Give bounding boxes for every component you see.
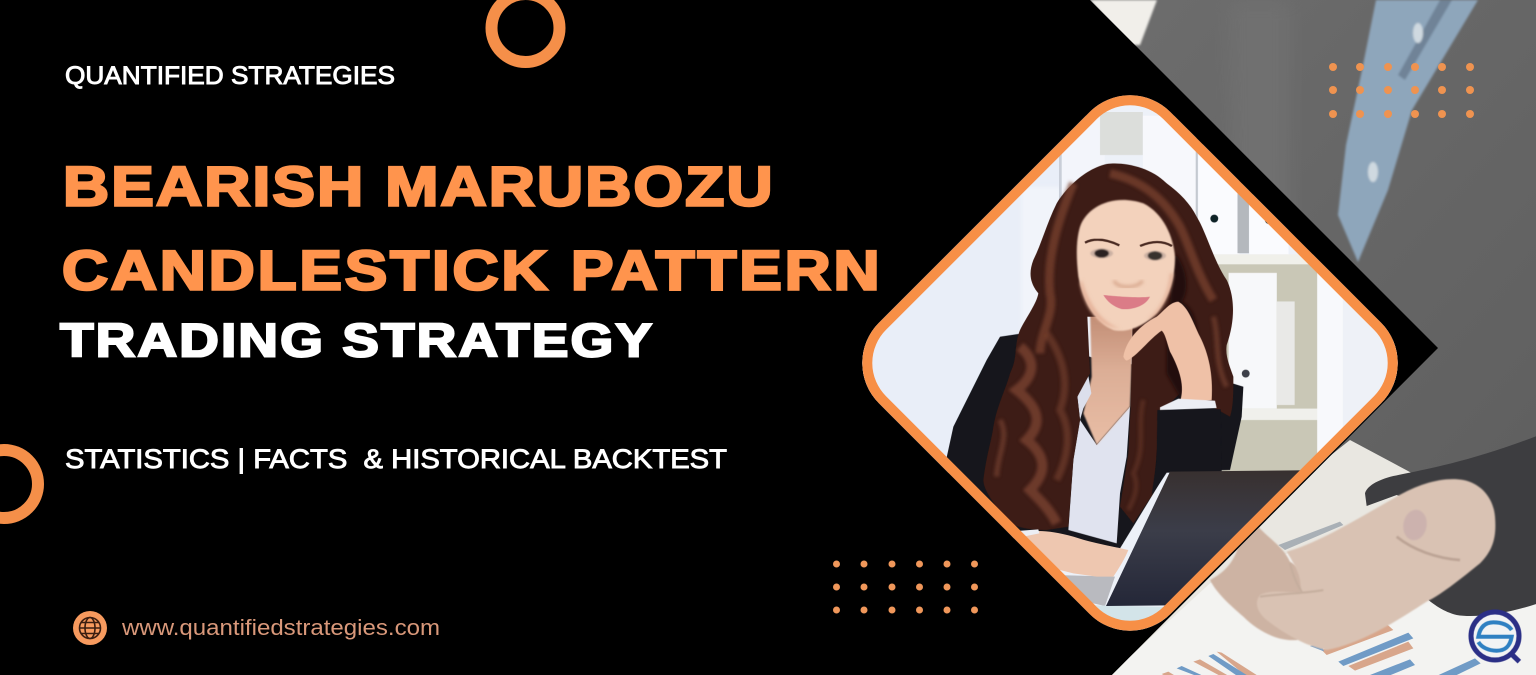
office shelves: [862, 112, 1398, 473]
back fingers: [1210, 527, 1302, 641]
subtitle: STATISTICS | FACTS & HISTORICAL BACKTEST: [65, 444, 727, 474]
dot grid top right: [1329, 63, 1474, 118]
neck and chest: [1083, 310, 1133, 445]
background photo: businessman with charts: [1090, 0, 1536, 675]
table and papers, drawn in enlarged coordinates: [1110, 433, 1536, 675]
paper edge: [1278, 522, 1343, 550]
open palm: [1257, 479, 1495, 650]
shirt cuff left: [1008, 529, 1039, 539]
blazer sleeve: [1152, 409, 1222, 495]
logo: SQ: [1471, 612, 1519, 662]
hand on chin: [1123, 302, 1212, 402]
hand on keyboard: [1017, 531, 1128, 577]
title line 1: BEARISH MARUBOZU: [63, 155, 773, 218]
laptop lid: [1106, 470, 1312, 606]
bar charts on paper: [1162, 624, 1481, 675]
businesswoman: [945, 163, 1337, 623]
website url: www.quantifiedstrategies.com: [121, 615, 440, 640]
portrait photo in rounded diamond: [850, 80, 1407, 635]
cheek shade: [1080, 273, 1173, 328]
thumbnail: [1404, 510, 1426, 540]
shirt placket: [1338, 0, 1478, 262]
white backdrop corner: [1090, 0, 1157, 45]
orange diamond frame: [846, 79, 1414, 647]
hair: left and crown: [983, 163, 1233, 530]
dot grid bottom: [833, 560, 978, 614]
laptop base: [1065, 575, 1115, 606]
suit jacket: [1090, 0, 1536, 520]
eyes: [1090, 249, 1166, 260]
white shirt: [1068, 407, 1130, 543]
decorative ring top: [492, 0, 560, 62]
lips: [1103, 295, 1150, 309]
title: [60, 155, 880, 367]
black blazer: [945, 334, 1243, 548]
decorative ring left: [0, 450, 38, 518]
white paper: [1110, 550, 1536, 675]
brand name: QUANTIFIED STRATEGIES: [65, 62, 395, 90]
finger creases: [1260, 588, 1324, 598]
table surface: [1112, 440, 1411, 675]
title line 2: CANDLESTICK PATTERN: [62, 239, 880, 302]
face: [1077, 200, 1175, 331]
shirt cuff: [1160, 399, 1217, 410]
thumb crease: [1397, 537, 1460, 560]
hair highlights: [997, 173, 1227, 523]
jacket seam: [1225, 135, 1295, 205]
icon: globe: [73, 611, 107, 645]
dark hair shadow: [1167, 253, 1198, 400]
shirt collar: [1077, 370, 1091, 420]
desk: [1083, 605, 1187, 623]
nose: [1114, 281, 1143, 287]
sleeve: [1365, 433, 1536, 616]
title line 3: TRADING STRATEGY: [60, 314, 652, 367]
eyebrows: [1085, 240, 1172, 246]
